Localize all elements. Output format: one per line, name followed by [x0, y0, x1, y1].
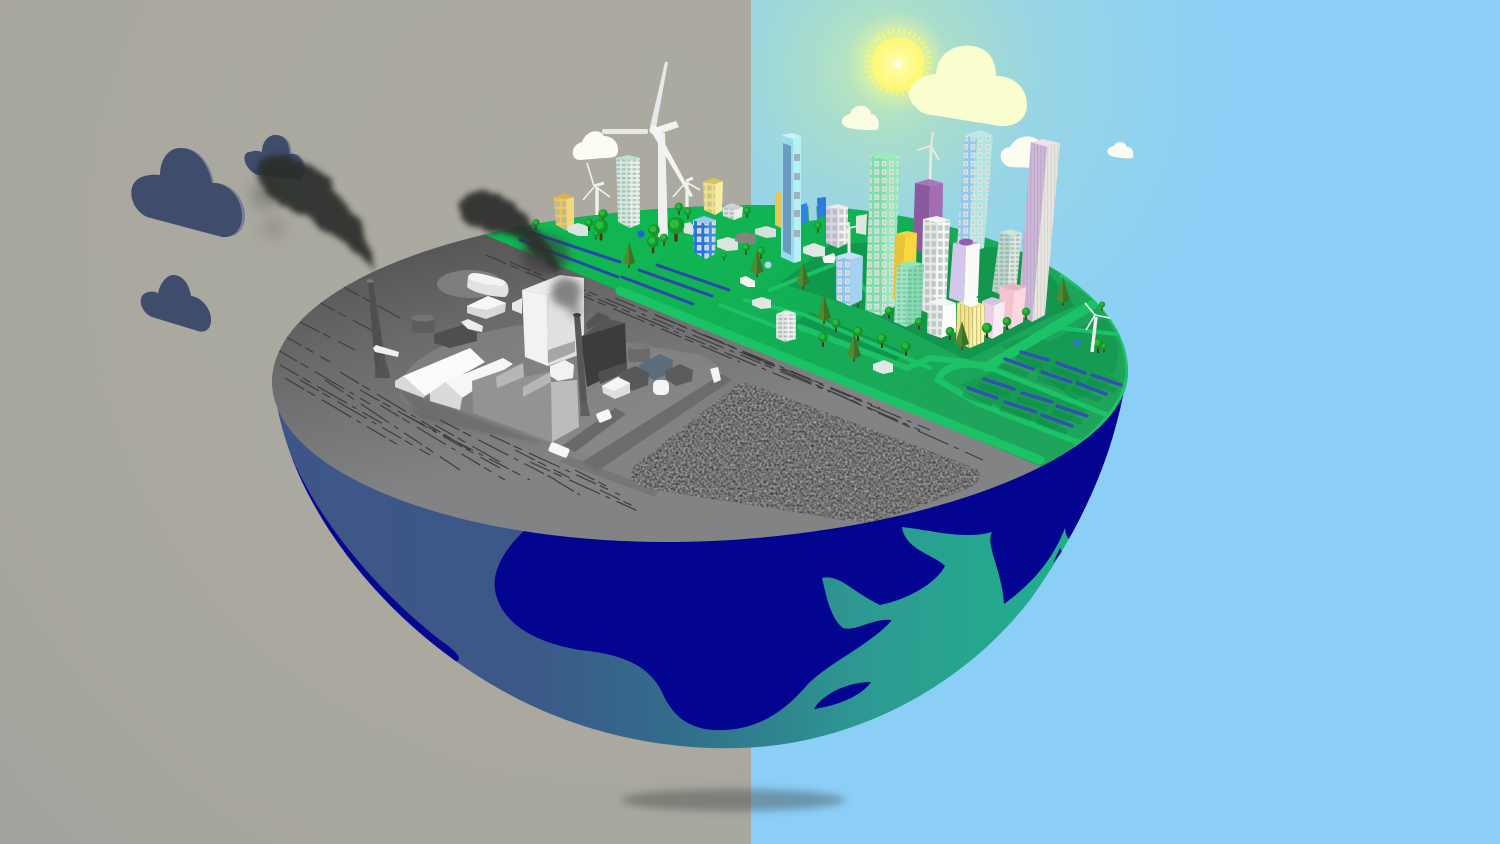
wind turbine: large: [602, 62, 693, 237]
sun: rays: [867, 31, 929, 93]
trees: field: [532, 203, 1107, 362]
small low buildings and vans: field: [568, 222, 893, 374]
dark cloud: small upper: [244, 135, 306, 180]
sun-lit cloud: [909, 46, 1027, 126]
building: white low: [927, 298, 956, 338]
building: pale pink block: [980, 297, 1005, 339]
building: yellow striped: [956, 295, 985, 348]
building: tall lilac tower: [1018, 139, 1060, 322]
building: pink block: [998, 283, 1026, 329]
background: clean blue sky half: [751, 0, 1500, 844]
white cloud behind tall tower: [1001, 137, 1040, 168]
globe top: grey industrial half: [272, 205, 1128, 542]
grey dashes: road markings: [278, 255, 983, 512]
power plant: white arched hall one: [395, 348, 485, 398]
globe: lower hemisphere: [275, 380, 1128, 748]
dark cloud: large: [131, 148, 245, 237]
ocean: main central sea: [495, 380, 1128, 730]
building: cyan slim tower: [781, 133, 801, 263]
grey plant shadow: [398, 389, 534, 441]
trees: front city: [885, 307, 1030, 350]
small cloud: [842, 106, 879, 130]
building: grey small behind: [856, 214, 867, 235]
power plant: left chimney: [366, 279, 390, 378]
power plant: white arched hall two: [430, 358, 513, 410]
grey hazed lot around plant: [398, 325, 722, 431]
coal field: [631, 383, 980, 522]
wind turbine: on blue building: [842, 222, 858, 255]
solar panels: lower right field: [963, 352, 1121, 432]
power plant: white annex: [550, 360, 574, 381]
small far cloud: [1107, 142, 1133, 158]
power plant: white tower block: [522, 275, 584, 366]
building: green tall tower: [865, 152, 899, 316]
dark cloud: lower: [141, 275, 211, 332]
rim highlight: [1060, 275, 1127, 447]
wind turbine: far right: [1085, 303, 1110, 352]
smoke plume: main chimney: [457, 191, 582, 318]
building: lilac and white mid: [949, 238, 980, 303]
building: yellow pale: [703, 178, 723, 215]
wind turbine: small right of big one: [673, 178, 700, 207]
power plant: main chimney: [573, 313, 590, 416]
building: yellow block: [893, 231, 917, 303]
ocean: small spot right: [1053, 548, 1062, 563]
power plant: sawtooth turbine hall: [472, 363, 579, 442]
ocean: small island sea: [814, 682, 871, 709]
building: light blue: [836, 252, 863, 306]
grey tank pad: [437, 270, 503, 298]
sun: glow: [848, 12, 948, 112]
wind turbine: small left: [583, 163, 610, 215]
smoke plume: left chimney: [251, 155, 375, 268]
plant vehicles: [548, 409, 612, 458]
building: lilac-grey mid: [826, 204, 848, 248]
building: purple tower: [913, 179, 943, 256]
power plant: dark boiler house: [581, 312, 627, 387]
power plant: annex blocks and tanks: [602, 342, 721, 399]
power plant: upper storage and blocks: [373, 273, 522, 357]
grey paths around coal field: [582, 374, 732, 472]
building: blue-mint tower: [957, 130, 993, 252]
white cloud near turbine: [573, 131, 618, 160]
green half of the disc: [478, 190, 1140, 470]
sun: core: [871, 37, 925, 91]
ground shadow: [621, 789, 845, 811]
wind turbine: on purple tower: [917, 132, 939, 180]
green light roads: [620, 262, 1125, 460]
building: blue small cluster: [775, 192, 826, 228]
background: polluted grey half: [0, 0, 751, 844]
building: grey-green tower: [992, 229, 1022, 297]
building: white small block: [776, 310, 796, 342]
building: yellow left: [554, 193, 574, 231]
building: mint block: [894, 261, 924, 327]
building: white tower: [921, 216, 950, 315]
building: mint tower left: [616, 155, 640, 228]
building: blue block: [693, 216, 716, 259]
building: grey behind blue: [722, 203, 743, 220]
ocean: left crescent sea: [289, 450, 459, 662]
solar panels: upper field: [520, 232, 729, 304]
globe top: details clipped to disc: [278, 190, 1140, 522]
green darker lawns: [780, 240, 1075, 362]
